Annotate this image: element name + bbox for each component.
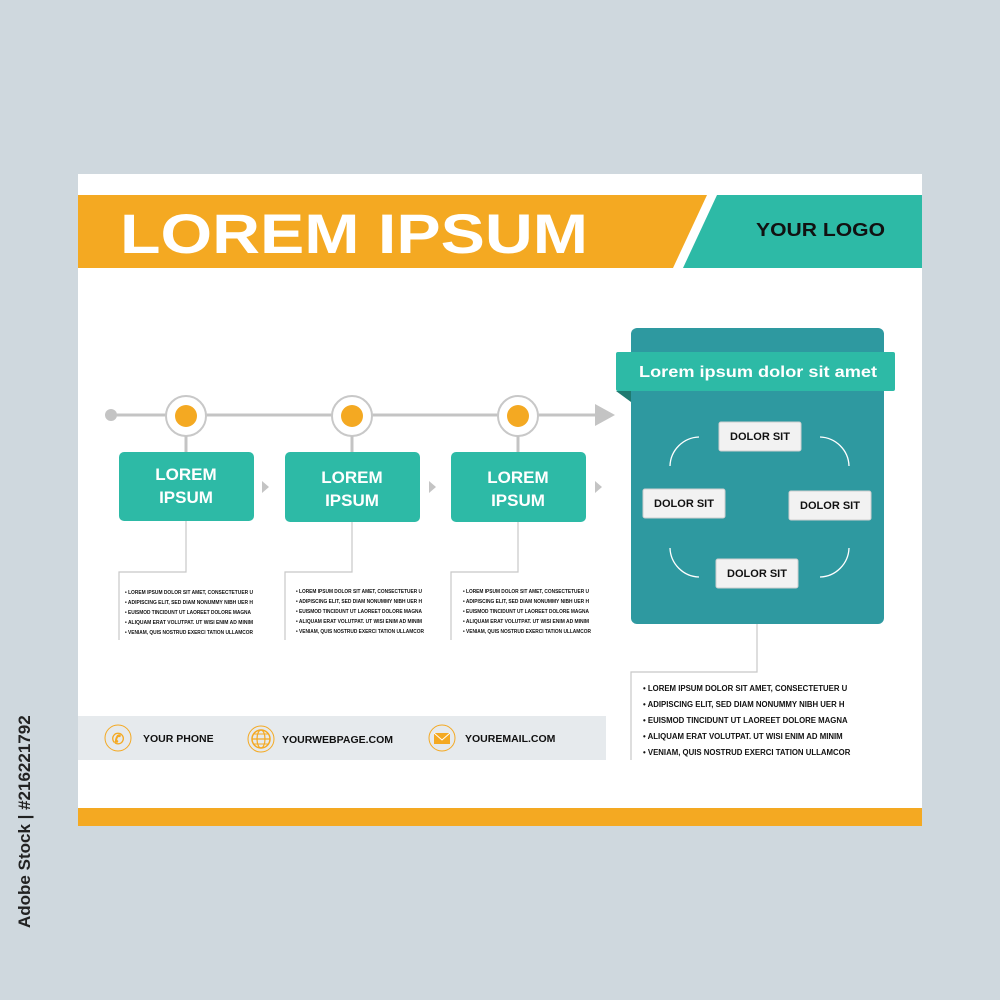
cycle arcs — [670, 437, 849, 577]
panel: white card — [78, 174, 922, 826]
dolor sit boxes — [643, 422, 871, 588]
contact bar: YOUREMAIL.COM — [465, 733, 556, 745]
contact bar: YOURWEBPAGE.COM — [282, 734, 393, 746]
step 3: LOREM — [487, 468, 549, 487]
footer orange strip — [78, 808, 922, 826]
right bullet text: • LOREM IPSUM DOLOR SIT AMET, CONSECTETUER U — [643, 684, 848, 693]
step 3: • LOREM IPSUM DOLOR SIT AMET, CONSECTETUER U — [463, 589, 589, 595]
step 1: • LOREM IPSUM DOLOR SIT AMET, CONSECTETUER U — [125, 590, 253, 596]
header: logo band — [683, 195, 922, 268]
step 2 — [285, 396, 436, 640]
step 3: • EUISMOD TINCIDUNT UT LAOREET DOLORE MAGNA — [463, 609, 589, 615]
header: orange title band — [78, 195, 707, 268]
step 1: LOREM — [155, 465, 217, 484]
logo text: YOUR LOGO — [756, 220, 885, 240]
timeline — [105, 404, 615, 426]
step 3: • ALIQUAM ERAT VOLUTPAT. UT WISI ENIM AD MINIM — [463, 619, 589, 625]
step 1: • ALIQUAM ERAT VOLUTPAT. UT WISI ENIM AD MINIM — [125, 620, 253, 626]
step 1: IPSUM — [159, 488, 213, 507]
panel: cycle — [616, 328, 895, 624]
dolor sit boxes: DOLOR SIT — [654, 498, 714, 510]
dolor sit boxes: DOLOR SIT — [730, 431, 790, 443]
side credit text: Adobe Stock | #216221792 — [15, 715, 34, 928]
step 2: • VENIAM, QUIS NOSTRUD EXERCI TATION ULLAMCOR — [296, 629, 424, 635]
right bullet text: • ADIPISCING ELIT, SED DIAM NONUMMY NIBH UER H — [643, 700, 845, 709]
step 2: • ALIQUAM ERAT VOLUTPAT. UT WISI ENIM AD MINIM — [296, 619, 422, 625]
step 2: IPSUM — [325, 491, 379, 510]
step 3 — [451, 396, 602, 640]
step 2: • ADIPISCING ELIT, SED DIAM NONUMMY NIBH UER H — [296, 599, 422, 605]
icon: phone: ✆ — [112, 731, 125, 748]
panel: cycle: Lorem ipsum dolor sit amet — [639, 364, 878, 381]
step 1: • EUISMOD TINCIDUNT UT LAOREET DOLORE MAGNA — [125, 610, 251, 616]
step 3: IPSUM — [491, 491, 545, 510]
step 1: • ADIPISCING ELIT, SED DIAM NONUMMY NIBH UER H — [125, 600, 253, 606]
step 1 — [119, 396, 269, 640]
step 2: • EUISMOD TINCIDUNT UT LAOREET DOLORE MAGNA — [296, 609, 422, 615]
contact bar: YOUR PHONE — [143, 733, 214, 745]
right bullet text: • VENIAM, QUIS NOSTRUD EXERCI TATION ULLAMCOR — [643, 748, 851, 757]
icon: globe — [248, 726, 274, 752]
icon: email — [429, 725, 455, 751]
right bullet text — [631, 624, 851, 760]
contact bar — [78, 716, 606, 760]
step 3: • ADIPISCING ELIT, SED DIAM NONUMMY NIBH UER H — [463, 599, 589, 605]
step 3: • VENIAM, QUIS NOSTRUD EXERCI TATION ULLAMCOR — [463, 629, 591, 635]
right bullet text: • ALIQUAM ERAT VOLUTPAT. UT WISI ENIM AD MINIM — [643, 732, 843, 741]
dolor sit boxes: DOLOR SIT — [727, 568, 787, 580]
title: LOREM IPSUM — [120, 202, 588, 265]
step 2: LOREM — [321, 468, 383, 487]
banner — [616, 352, 895, 391]
dolor sit boxes: DOLOR SIT — [800, 500, 860, 512]
step 2: • LOREM IPSUM DOLOR SIT AMET, CONSECTETUER U — [296, 589, 422, 595]
icon: phone — [105, 725, 131, 751]
step 1: • VENIAM, QUIS NOSTRUD EXERCI TATION ULLAMCOR — [125, 630, 253, 636]
right bullet text: • EUISMOD TINCIDUNT UT LAOREET DOLORE MAGNA — [643, 716, 848, 725]
